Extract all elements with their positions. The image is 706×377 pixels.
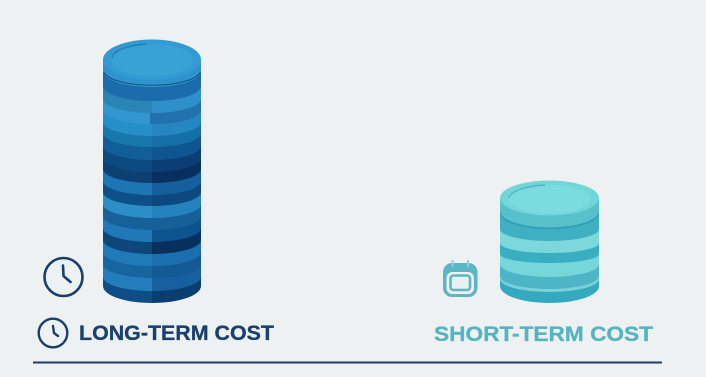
icon: clock beside long-term label — [39, 319, 67, 347]
icon: calendar — [443, 260, 478, 297]
label: long-term cost: LONG-TERM COST — [79, 322, 274, 345]
baseline rule — [33, 362, 662, 364]
label: short-term cost: SHORT-TERM COST — [434, 323, 653, 346]
icon: clock above label — [44, 258, 82, 296]
tall coin stack: long-term cost — [103, 40, 201, 303]
short coin stack: short-term cost — [500, 180, 599, 303]
